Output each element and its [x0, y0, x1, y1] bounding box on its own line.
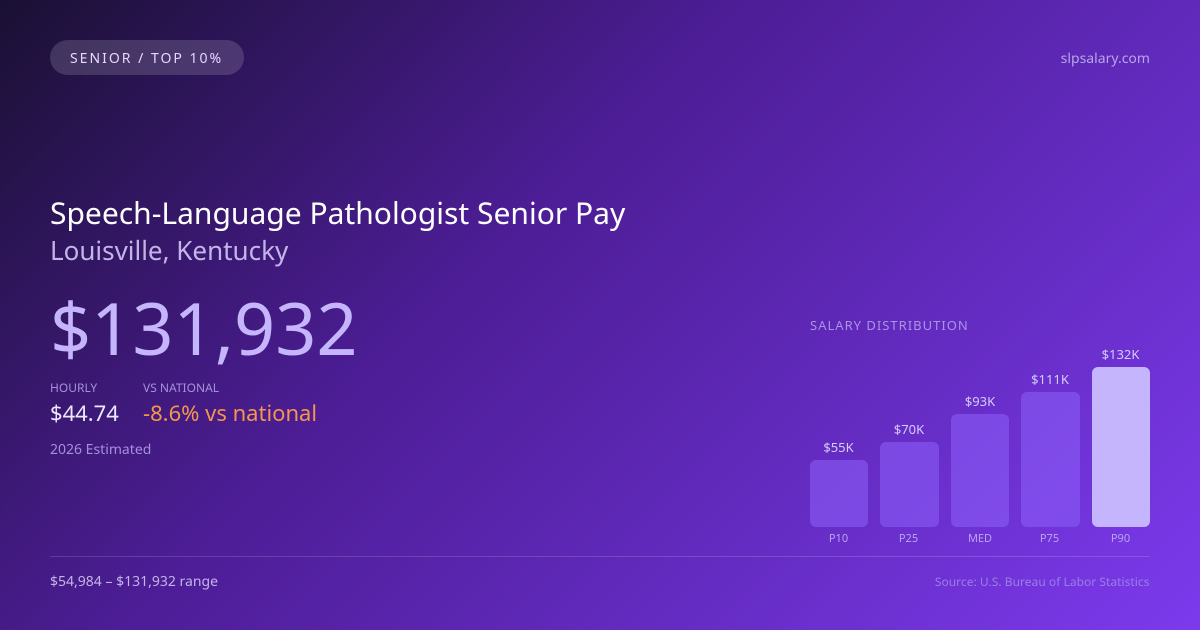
site name: slpsalary.com: [1061, 49, 1150, 68]
title: Speech-Language Pathologist Senior Pay: [50, 192, 625, 233]
main salary figure: $131,932: [50, 279, 358, 377]
bar P10: P10: [829, 531, 848, 546]
bar P75: [1021, 370, 1080, 546]
versus national label: VS NATIONAL: [143, 379, 219, 396]
bar P25: [880, 420, 939, 546]
bar P90: [1092, 345, 1150, 546]
versus national value: -8.6% vs national: [143, 398, 317, 428]
bar P90: P90: [1111, 531, 1130, 546]
bar P25: P25: [899, 531, 918, 546]
hourly value: $44.74: [50, 398, 119, 428]
bar median: $93K: [965, 392, 995, 410]
chart heading: SALARY DISTRIBUTION: [810, 316, 969, 334]
bar chart: salary distribution: [810, 316, 1150, 546]
bar P10: $55K: [823, 438, 854, 456]
salary range: $54,984 – $131,932 range: [50, 572, 218, 591]
badge: seniority level: [50, 40, 244, 75]
source note: Source: U.S. Bureau of Labor Statistics: [935, 573, 1150, 590]
bar P25: $70K: [894, 420, 924, 438]
stat: versus national: [143, 379, 317, 428]
bar median: [951, 392, 1009, 546]
bar median: MED: [968, 531, 992, 546]
location subtitle: Louisville, Kentucky: [50, 232, 288, 268]
bar P75: $111K: [1031, 370, 1069, 388]
bar P75: P75: [1040, 531, 1059, 546]
bar P10: [810, 438, 868, 546]
bar P90: $132K: [1102, 345, 1139, 363]
stat: hourly: [50, 379, 119, 428]
hourly label: HOURLY: [50, 379, 97, 396]
badge: seniority level: SENIOR / TOP 10%: [70, 49, 223, 68]
estimate note: 2026 Estimated: [50, 440, 151, 459]
